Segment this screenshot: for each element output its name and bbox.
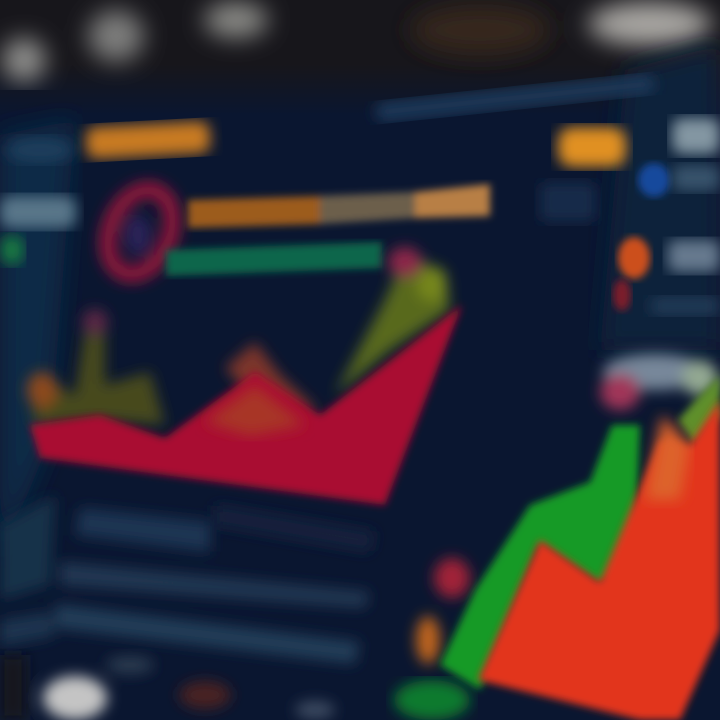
title text: orange bar <box>188 184 490 228</box>
data table rows <box>0 495 375 664</box>
chart: orange highlight <box>205 385 305 436</box>
icon: logo ring <box>96 180 184 284</box>
room highlights at top <box>2 2 712 82</box>
tag: orange right <box>558 127 626 167</box>
label: grey text <box>668 240 720 272</box>
heading tag: orange <box>85 121 211 159</box>
icon: orange and red badge <box>618 237 650 279</box>
red area chart <box>27 247 462 505</box>
chart: green right spike <box>678 375 720 445</box>
chart: orange top edge <box>645 415 690 500</box>
right panel items <box>613 118 720 315</box>
small text under right tag <box>540 182 596 222</box>
right side screen <box>600 45 720 350</box>
label: light text <box>672 118 720 154</box>
chart: light header <box>416 354 718 664</box>
chart: orange-red area <box>478 400 720 720</box>
left side screen <box>0 120 75 560</box>
left screen labels <box>0 137 76 265</box>
label: muted text <box>672 165 720 191</box>
top header text: faint blue <box>375 73 655 123</box>
foreground: bottom objects <box>0 655 335 720</box>
chart: crimson area <box>30 305 462 505</box>
icon: badge tail <box>613 279 631 311</box>
chart: green area <box>440 425 640 690</box>
label: dim text <box>650 297 720 315</box>
icon: blue dot <box>638 163 670 197</box>
chart: green foot <box>394 680 470 720</box>
lower right chart <box>394 354 720 720</box>
subtitle text: green bar <box>166 242 382 276</box>
chart: green and orange overlays <box>27 247 450 425</box>
